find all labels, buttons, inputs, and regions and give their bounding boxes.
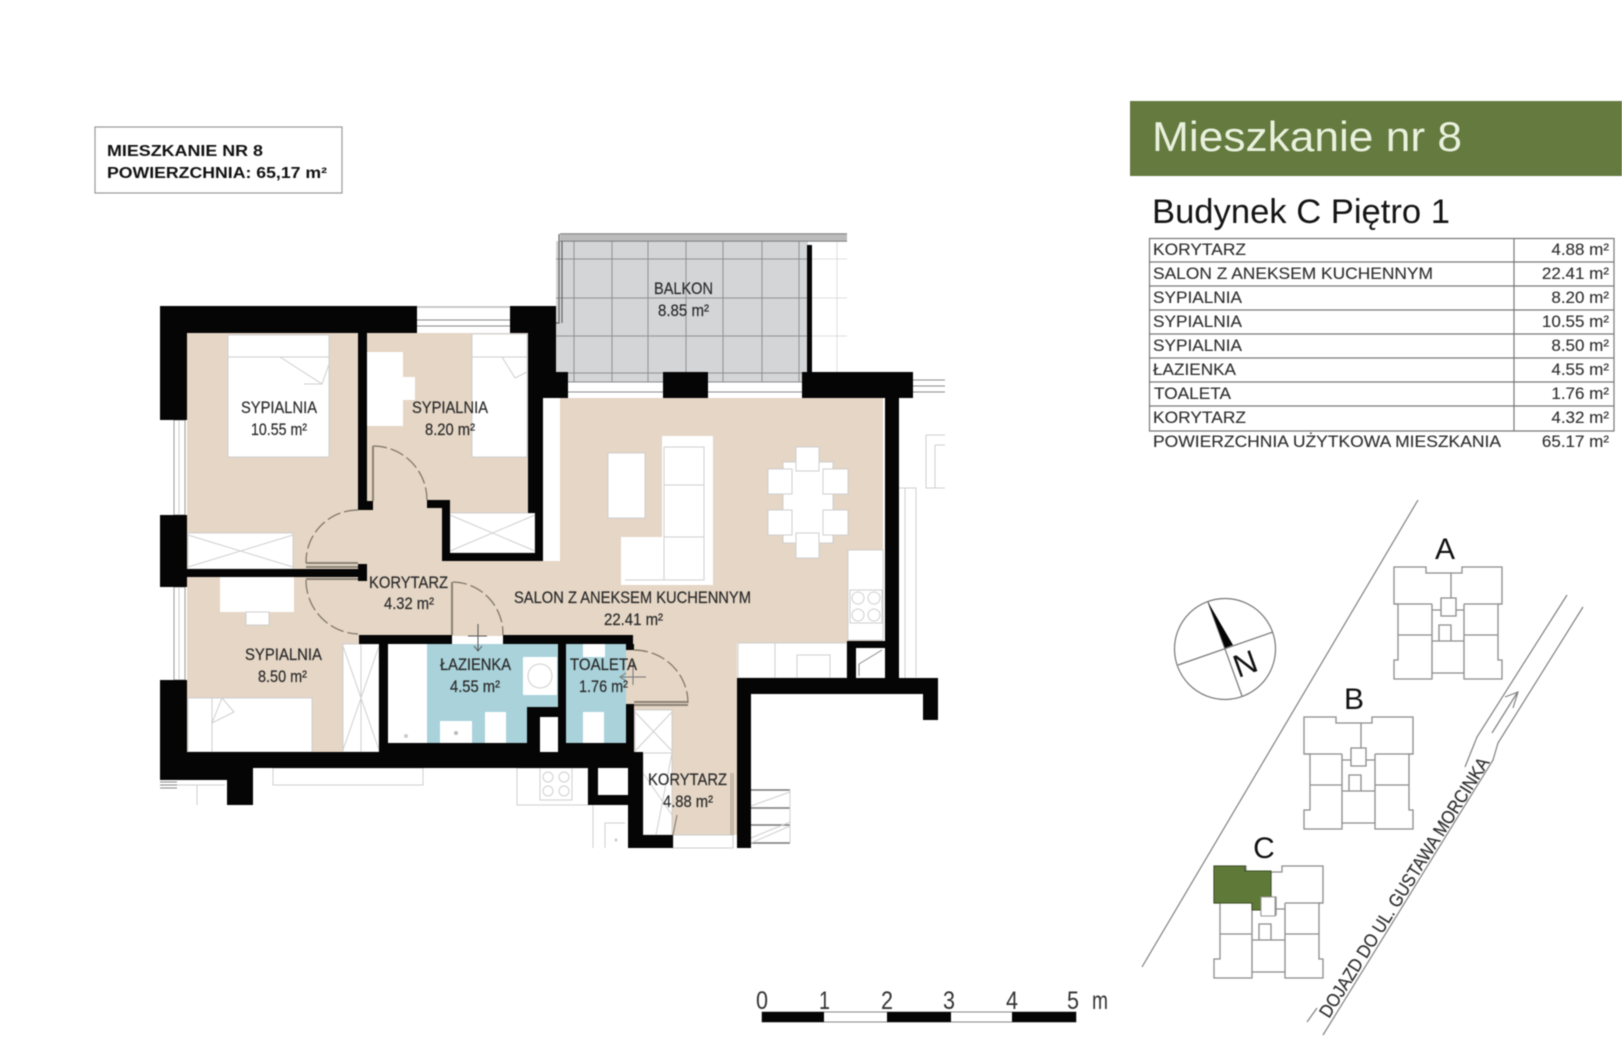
- room label: bedroom 8.20: [412, 398, 489, 439]
- room label: bedroom 10.55: [241, 398, 318, 439]
- highlighted apartment: [1214, 866, 1271, 910]
- building C with highlighted apartment: C: [1253, 832, 1275, 865]
- area table: 4.55 m²: [1551, 360, 1609, 379]
- walls: [160, 245, 938, 848]
- room label: toilet: [570, 655, 638, 696]
- scale bar: 1: [819, 987, 830, 1015]
- road lines and arrow: [1307, 595, 1583, 1035]
- wet room floors: blue: [427, 644, 626, 743]
- floor plan: [160, 234, 945, 848]
- area table: 4.32 m²: [1551, 408, 1609, 427]
- room label: bedroom 8.20: 8.20 m²: [425, 420, 475, 439]
- area table: SYPIALNIA: [1153, 288, 1243, 307]
- title banner: Mieszkanie nr 8: [1152, 113, 1462, 160]
- area table: KORYTARZ: [1153, 408, 1246, 427]
- building B: B: [1344, 683, 1364, 716]
- scale bar: 2: [881, 987, 893, 1015]
- room label: living room with kitchenette: [514, 588, 751, 629]
- title banner: [1130, 101, 1622, 176]
- furniture: living room: [608, 436, 848, 585]
- area table: ŁAZIENKA: [1153, 360, 1237, 379]
- room label: bedroom 8.50: SYPIALNIA: [245, 645, 323, 664]
- room label: bedroom 8.20: SYPIALNIA: [412, 398, 489, 417]
- scale bar: [756, 987, 1108, 1022]
- area table: 1.76 m²: [1551, 384, 1609, 403]
- building A: [1394, 533, 1502, 679]
- room label: corridor 4.32: 4.32 m²: [384, 594, 434, 613]
- building A: A: [1435, 533, 1455, 566]
- room label: bathroom: ŁAZIENKA: [440, 655, 512, 674]
- area table: [1150, 238, 1614, 451]
- area table: 8.20 m²: [1551, 288, 1609, 307]
- info box: apartment number and area: MIESZKANIE NR 8: [107, 143, 263, 160]
- room label: bedroom 10.55: 10.55 m²: [251, 420, 307, 439]
- scale bar: 5: [1067, 987, 1079, 1015]
- area table: SYPIALNIA: [1153, 312, 1243, 331]
- room label: bathroom: [440, 655, 512, 696]
- room label: toilet: TOALETA: [570, 655, 638, 674]
- area table: 8.50 m²: [1551, 336, 1609, 355]
- closets in corridor: [635, 710, 733, 848]
- room label: living room with kitchenette: 22.41 m²: [604, 610, 663, 629]
- building B: [1304, 683, 1413, 829]
- room label: corridor 4.32: [369, 573, 448, 613]
- compass: [1174, 598, 1276, 700]
- building and floor heading: Budynek C Piętro 1: [1152, 193, 1450, 231]
- room label: balcony: BALKON: [654, 279, 713, 298]
- exterior context: lines outside the flat: [160, 435, 945, 848]
- room label: bathroom: 4.55 m²: [450, 677, 500, 696]
- area table: SALON Z ANEKSEM KUCHENNYM: [1153, 264, 1433, 283]
- room label: balcony: 8.85 m²: [658, 301, 709, 320]
- building C with highlighted apartment: [1214, 832, 1323, 978]
- site boundary line: [1142, 500, 1418, 967]
- area table: 4.88 m²: [1551, 240, 1609, 259]
- room label: corridor 4.88: [648, 770, 727, 811]
- scale bar: m: [1092, 987, 1108, 1015]
- room label: corridor 4.88: KORYTARZ: [648, 770, 727, 789]
- scale bar: 4: [1006, 987, 1018, 1015]
- room label: balcony: [654, 279, 713, 320]
- kitchen units: [738, 550, 885, 678]
- bathroom fixtures: [388, 644, 605, 752]
- scale bar: 3: [943, 987, 955, 1015]
- doors: [306, 446, 688, 705]
- windows: [174, 306, 945, 680]
- scale bar: 0: [756, 987, 768, 1015]
- area table: SYPIALNIA: [1153, 336, 1243, 355]
- road label: DOJAZD DO UL. GUSTAWA MORCINKA: [1315, 753, 1494, 1021]
- area table: 22.41 m²: [1542, 264, 1609, 283]
- area table: 10.55 m²: [1542, 312, 1609, 331]
- room label: bedroom 8.50: [245, 645, 323, 686]
- furniture: bedrooms: [188, 334, 535, 752]
- room floors: beige: [187, 333, 883, 835]
- room label: living room with kitchenette: SALON Z ANEKSEM KUCHENNYM: [514, 588, 751, 607]
- info box: apartment number and area: [95, 127, 342, 193]
- info box: apartment number and area: POWIERZCHNIA: 65,17 m²: [107, 165, 327, 182]
- area table: 65.17 m²: [1542, 432, 1609, 451]
- room label: bedroom 8.50: 8.50 m²: [258, 667, 307, 686]
- area table: TOALETA: [1154, 384, 1232, 403]
- compass: N: [1228, 643, 1262, 685]
- room label: corridor 4.88: 4.88 m²: [663, 792, 713, 811]
- room label: bedroom 10.55: SYPIALNIA: [241, 398, 318, 417]
- area table: KORYTARZ: [1153, 240, 1246, 259]
- area table: POWIERZCHNIA UŻYTKOWA MIESZKANIA: [1153, 432, 1502, 451]
- room label: corridor 4.32: KORYTARZ: [369, 573, 448, 592]
- room label: toilet: 1.76 m²: [579, 677, 628, 696]
- balcony floor with tile grid: [555, 234, 847, 382]
